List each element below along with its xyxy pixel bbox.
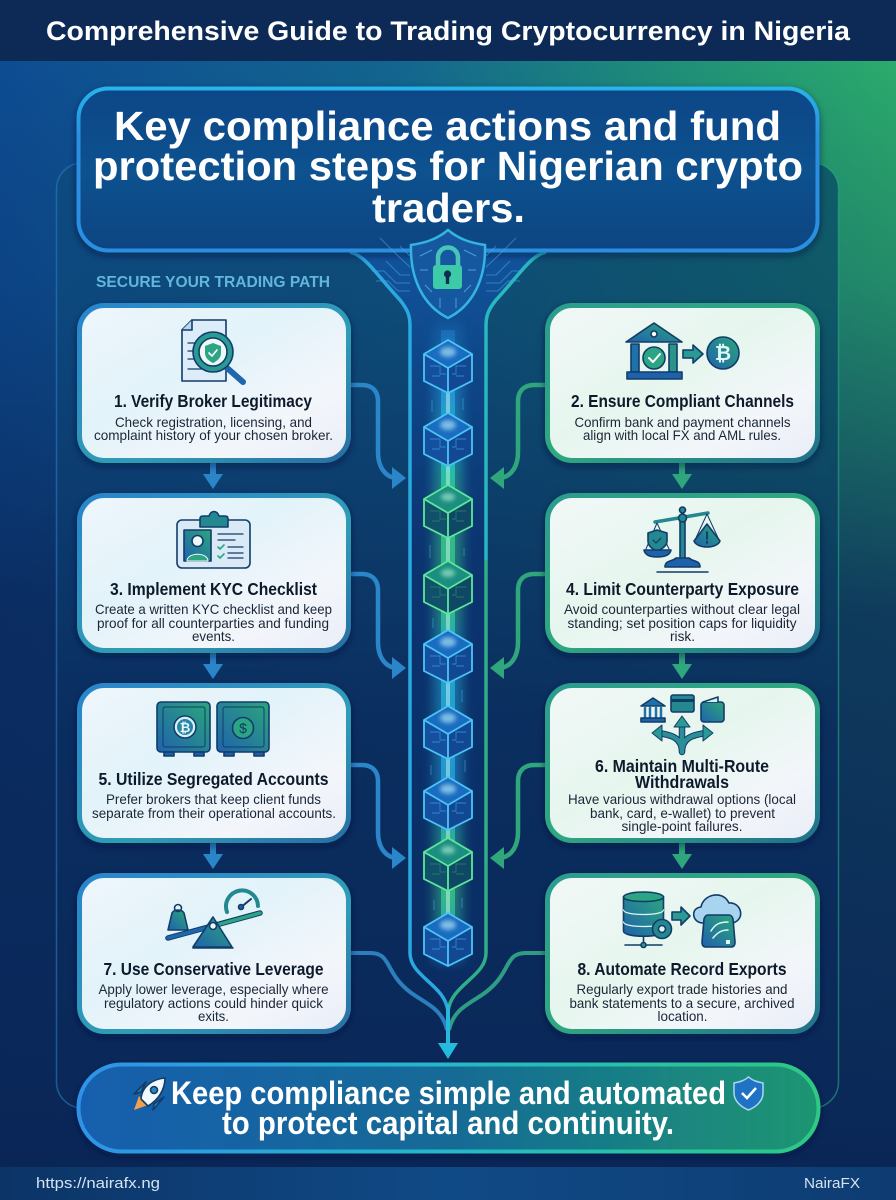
down arrows: right column (672, 463, 692, 869)
icon: bank to bitcoin: ₿ (715, 343, 731, 365)
card 6: maintain multi-route withdrawals: Have various withdrawal options (local (568, 791, 796, 807)
card 5: utilize segregated accounts (80, 686, 348, 840)
card 5: utilize segregated accounts: 5. Utilize Segregated Accounts (98, 769, 329, 789)
card 4: limit counterparty exposure (548, 496, 818, 650)
card 6: maintain multi-route withdrawals: single-point failures. (622, 818, 742, 834)
icon: ID card with checklist (177, 512, 250, 568)
card 5: utilize segregated accounts: separate from their operational accounts. (92, 805, 336, 821)
card 8: automate record exports: bank statements to a secure, archived (570, 995, 794, 1011)
card 8: automate record exports: Regularly export trade histories and (576, 981, 788, 997)
headline panel: protection steps for Nigerian crypto (93, 143, 803, 189)
connector arrows: right column to chain (490, 385, 545, 869)
card 2: ensure compliant channels: 2. Ensure Compliant Channels (571, 391, 794, 411)
top title bar (0, 0, 896, 61)
card 2: ensure compliant channels (548, 306, 818, 460)
card 7: use conservative leverage (80, 876, 348, 1032)
footer bar (0, 1167, 896, 1200)
card 1: verify broker legitimacy: complaint history of your chosen broker. (94, 427, 333, 443)
card 2: ensure compliant channels: align with local FX and AML rules. (583, 427, 781, 443)
icon: bank to bitcoin (626, 323, 739, 379)
icon: two safes: ₿ (180, 720, 190, 735)
card 7: use conservative leverage: regulatory actions could hinder quick (104, 995, 324, 1011)
section label: SECURE YOUR TRADING PATH (96, 274, 330, 291)
card 3: implement KYC checklist (80, 496, 348, 650)
card 7: use conservative leverage: exits. (198, 1008, 229, 1024)
top title bar: Comprehensive Guide to Trading Cryptocurrency in Nigeria (46, 16, 850, 46)
card 1: verify broker legitimacy: 1. Verify Broker Legitimacy (114, 391, 312, 411)
footer bar: https://nairafx.ng (36, 1175, 160, 1192)
footer bar: NairaFX (804, 1175, 860, 1192)
closing banner (78, 1064, 818, 1152)
outer frame panel (56, 163, 838, 1108)
icon: two safes (157, 702, 269, 756)
card 8: automate record exports: 8. Automate Record Exports (578, 959, 787, 979)
card 3: implement KYC checklist: events. (192, 628, 235, 644)
shield with padlock icon (372, 230, 524, 318)
icon: seesaw with weight and gauge (168, 890, 260, 948)
card 1: verify broker legitimacy (80, 306, 348, 460)
blockchain beam and cubes (424, 322, 472, 966)
card 6: maintain multi-route withdrawals (548, 686, 818, 840)
icon: rocket (134, 1078, 165, 1110)
card 7: use conservative leverage: Apply lower leverage, especially where (98, 981, 329, 997)
card 3: implement KYC checklist: 3. Implement KYC Checklist (110, 579, 317, 599)
card 4: limit counterparty exposure: Avoid counterparties without clear legal (564, 601, 800, 617)
closing banner: Keep compliance simple and automated (171, 1075, 726, 1111)
card 4: limit counterparty exposure: standing; set position caps for liquidity (568, 615, 796, 631)
headline panel: traders. (372, 185, 525, 231)
card 3: implement KYC checklist: Create a written KYC checklist and keep (95, 601, 332, 617)
down arrows: left column (203, 463, 223, 869)
icon: shield check (734, 1077, 763, 1110)
card 2: ensure compliant channels: Confirm bank and payment channels (574, 414, 790, 430)
card 8: automate record exports: location. (658, 1008, 708, 1024)
card 3: implement KYC checklist: proof for all counterparties and funding (97, 615, 329, 631)
card 1: verify broker legitimacy: Check registration, licensing, and (115, 414, 312, 430)
connector arrows: left column to chain (351, 385, 406, 869)
icon: document with magnifier (182, 320, 243, 382)
headline panel (78, 88, 818, 250)
headline panel: Key compliance actions and fund (114, 103, 781, 149)
card 4: limit counterparty exposure: risk. (670, 628, 695, 644)
card 6: maintain multi-route withdrawals: bank, card, e-wallet) to prevent (590, 805, 775, 821)
card 8: automate record exports (548, 876, 818, 1032)
icon: routes to bank, card and wallet (641, 695, 724, 752)
card 7: use conservative leverage: 7. Use Conservative Leverage (104, 959, 324, 979)
card 6: maintain multi-route withdrawals: Withdrawals (635, 772, 729, 792)
merging lines and final arrow (351, 953, 545, 1059)
closing banner: to protect capital and continuity. (222, 1105, 674, 1141)
icon: balance scales (644, 507, 720, 572)
card 6: maintain multi-route withdrawals: 6. Maintain Multi-Route (595, 756, 769, 776)
central channel (345, 250, 551, 1012)
icon: database to cloud drive (624, 892, 741, 948)
icon: two safes: $ (239, 720, 247, 736)
card 5: utilize segregated accounts: Prefer brokers that keep client funds (106, 791, 321, 807)
card 4: limit counterparty exposure: 4. Limit Counterparty Exposure (566, 579, 799, 599)
